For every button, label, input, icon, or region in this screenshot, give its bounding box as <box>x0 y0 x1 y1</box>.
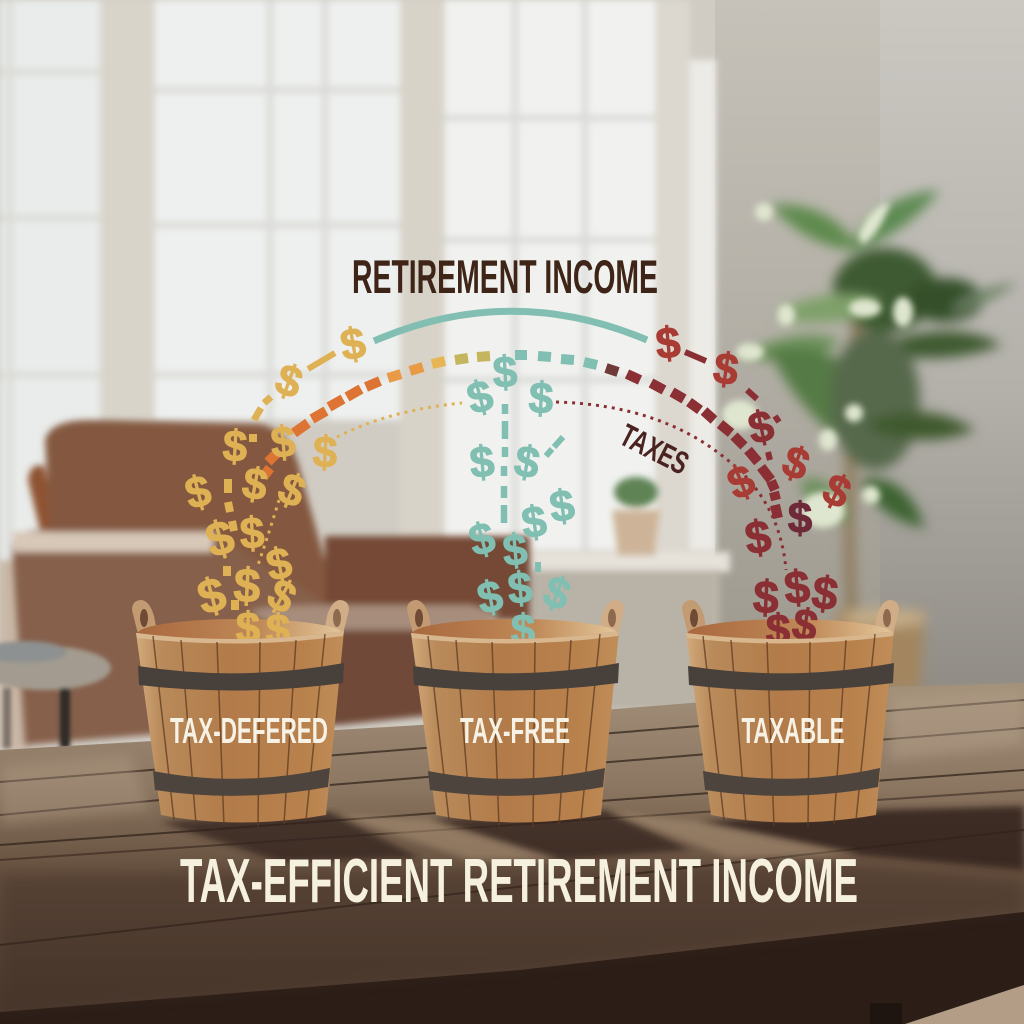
label: taxes: TAXES <box>614 417 695 481</box>
gold dollar signs: $ <box>236 604 260 653</box>
red dollar signs: $ <box>654 318 682 369</box>
teal dollar signs: $ <box>537 566 577 621</box>
side table <box>0 641 111 748</box>
gold dollar signs: $ <box>337 318 369 371</box>
red dollar signs: $ <box>789 599 821 652</box>
gold dollar signs: $ <box>259 569 304 624</box>
bucket back: tax-deferred <box>132 600 349 649</box>
gold dollar signs <box>180 318 369 655</box>
teal dollar signs: $ <box>506 563 534 614</box>
bucket back: tax-free <box>407 600 624 649</box>
gold dollar signs: $ <box>221 421 248 472</box>
gold dollar signs: $ <box>232 559 262 614</box>
label: taxable: TAXABLE <box>742 710 844 751</box>
red dollar signs: $ <box>752 570 780 624</box>
teal dollar signs: $ <box>501 525 529 576</box>
red dollar signs: $ <box>742 509 774 565</box>
red dollar signs: $ <box>782 560 812 614</box>
teal dollar signs: $ <box>547 481 578 532</box>
teal dollar signs: $ <box>527 373 554 424</box>
wooden table <box>0 683 1024 1024</box>
teal dollar signs: $ <box>464 513 500 566</box>
gold dollar signs: $ <box>239 508 266 559</box>
gold dollar signs: $ <box>311 427 338 478</box>
gold dollar signs: $ <box>262 538 296 591</box>
gold dollar signs: $ <box>269 417 297 468</box>
red dollar signs: $ <box>809 565 841 621</box>
gold dollar signs: $ <box>269 354 309 409</box>
bucket: tax-deferred <box>136 631 344 827</box>
red dollar signs <box>654 318 858 655</box>
sofa <box>12 420 530 745</box>
red dollar signs: $ <box>815 464 858 519</box>
teal dollar signs <box>462 347 578 655</box>
teal dollar signs: $ <box>462 371 498 424</box>
arc: thick dashed teal <box>504 355 597 572</box>
teal dollar signs: $ <box>511 606 535 655</box>
gold dollar signs: $ <box>266 606 290 655</box>
label: tax-free: TAX-FREE <box>460 710 570 751</box>
arcs: gold flow <box>227 353 462 610</box>
teal dollar signs: $ <box>468 437 496 488</box>
gold dollar signs: $ <box>271 463 312 518</box>
teal dollar signs: $ <box>492 347 519 398</box>
gold dollar signs: $ <box>239 458 271 511</box>
bucket: tax-free <box>411 631 619 827</box>
red dollar signs: $ <box>744 401 778 454</box>
gold dollar signs: $ <box>200 510 240 569</box>
large potted plant <box>722 190 1018 690</box>
gold dollar signs: $ <box>180 466 216 519</box>
gold dollar signs: $ <box>192 567 232 626</box>
teal dollar signs: $ <box>519 497 550 548</box>
bucket back: taxable <box>682 600 899 649</box>
arc: thick dashed red <box>556 352 786 570</box>
small plant on windowsill <box>612 477 660 555</box>
red dollar signs: $ <box>710 344 741 395</box>
red dollar signs: $ <box>788 494 812 543</box>
red dollar signs: $ <box>721 455 762 510</box>
arc: thick dashed orange to gold <box>263 356 490 477</box>
label: tax-defered: TAX-DEFERED <box>170 710 328 751</box>
red dollar signs: $ <box>766 606 790 655</box>
teal dollar signs: $ <box>473 571 507 624</box>
arc: retirement income teal <box>374 311 647 341</box>
teal dollar signs: $ <box>511 436 543 489</box>
red dollar signs: $ <box>776 436 816 491</box>
bucket: taxable <box>686 631 894 827</box>
heading: retirement income: RETIREMENT INCOME <box>352 250 658 303</box>
